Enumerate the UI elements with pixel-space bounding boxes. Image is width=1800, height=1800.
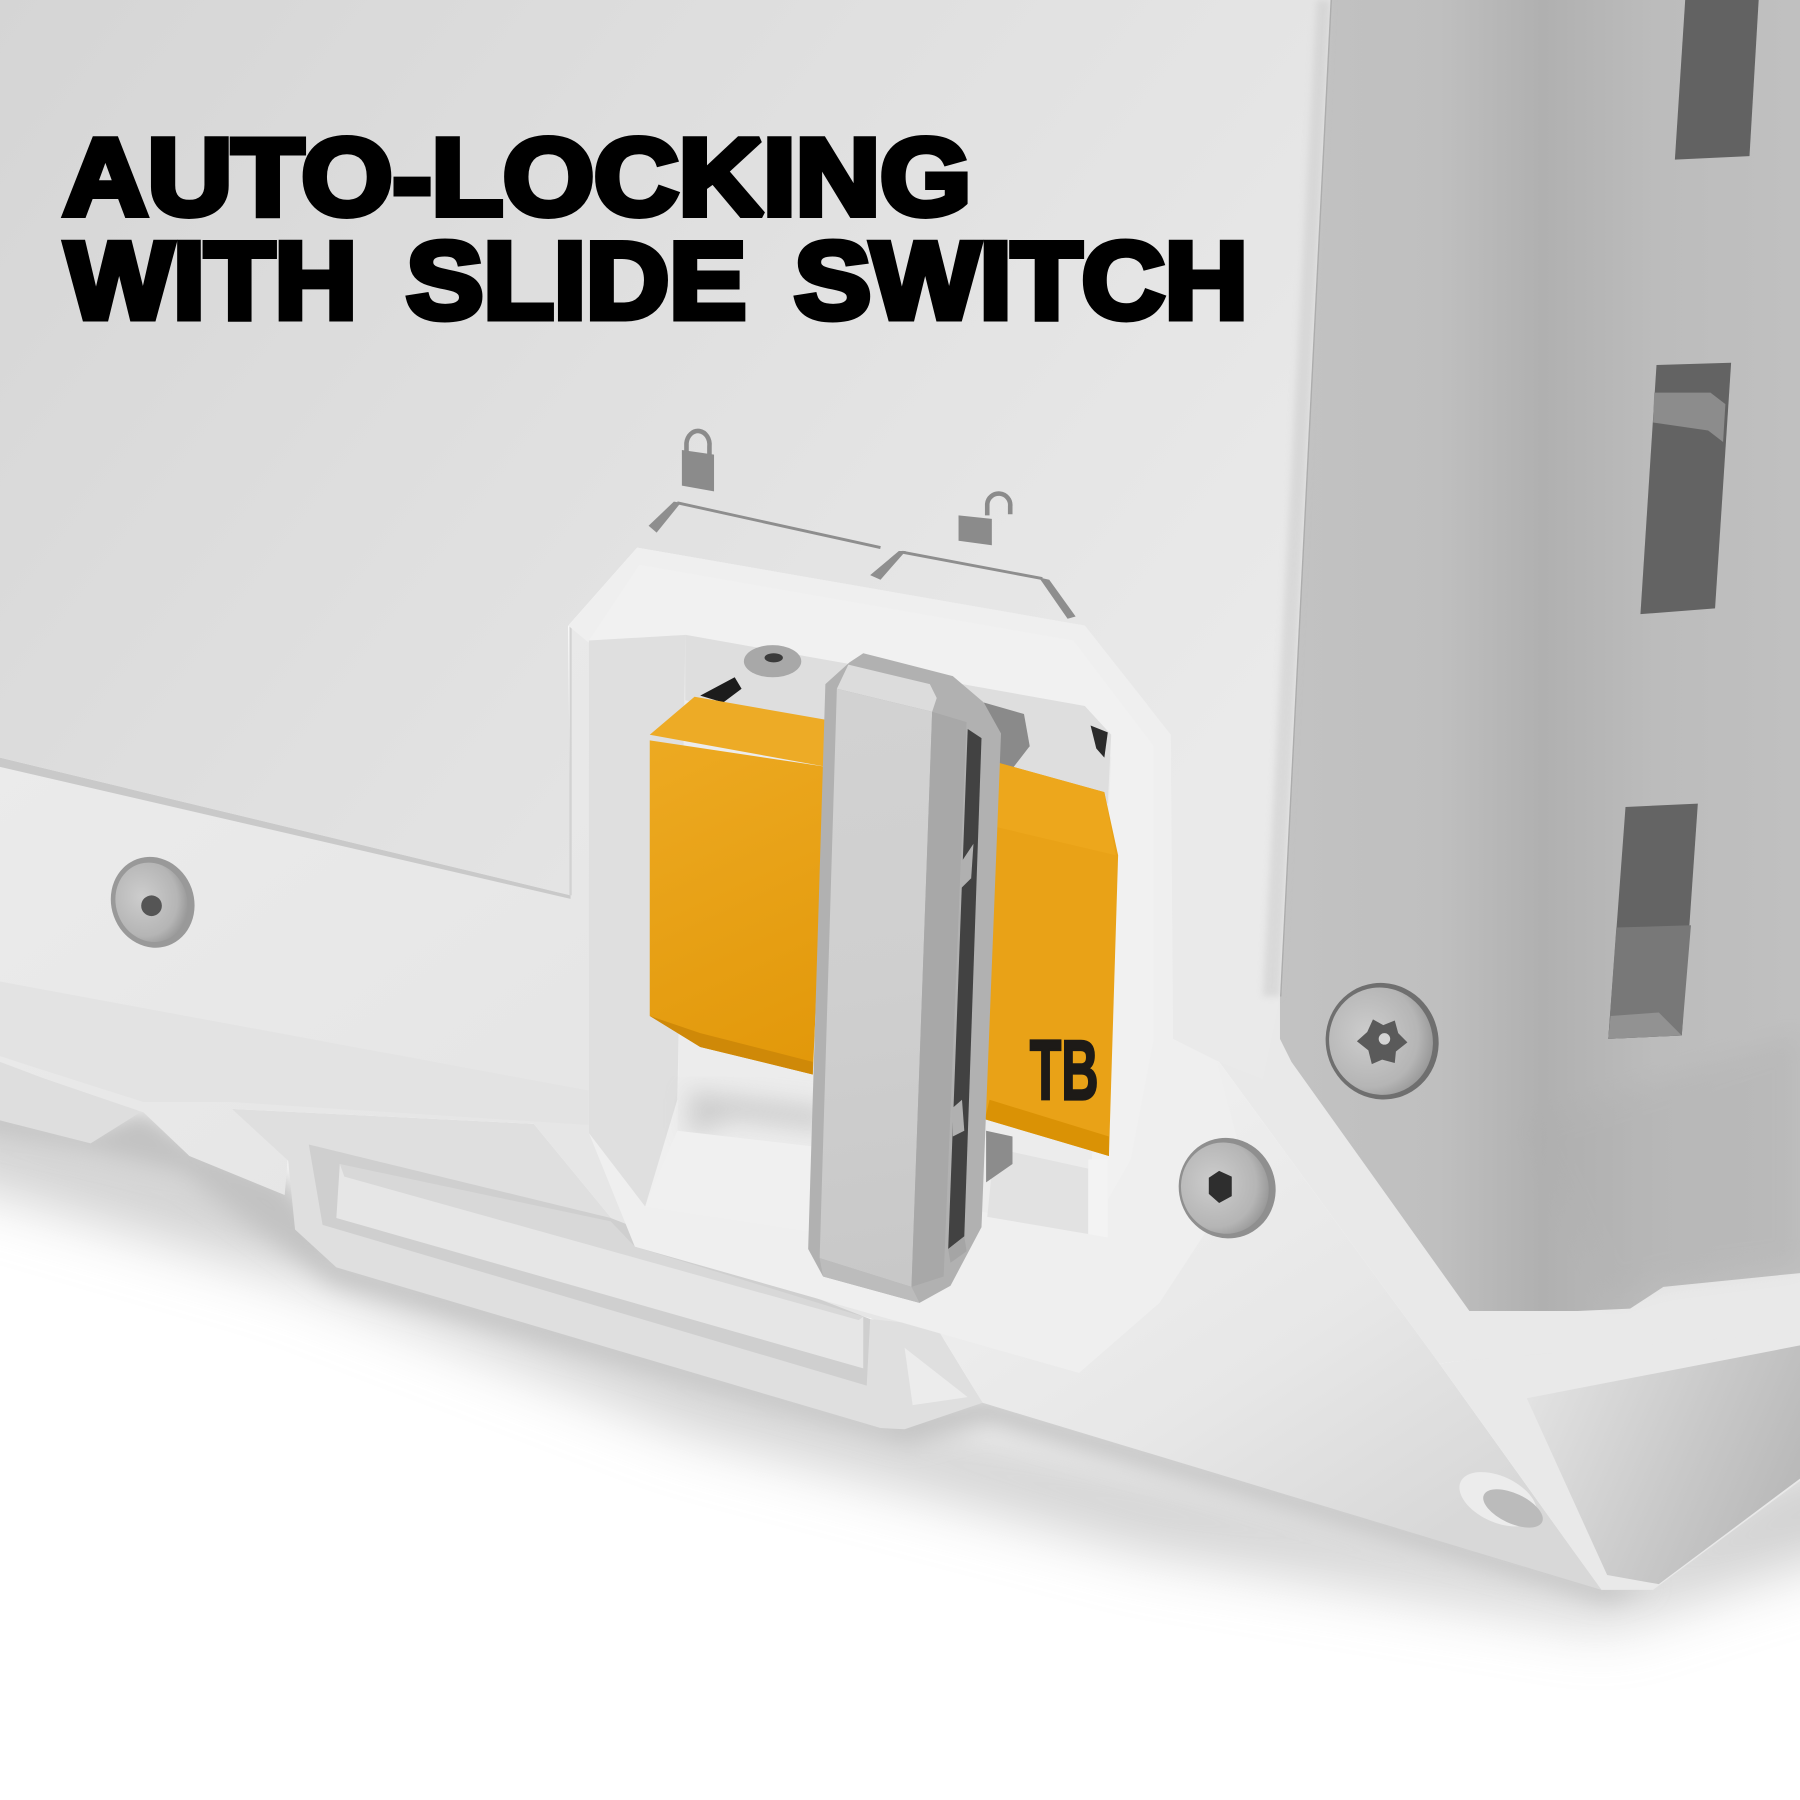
side panel: gray vented wall xyxy=(1280,0,1800,1311)
frame rim xyxy=(589,565,1154,1234)
title xyxy=(63,117,1248,342)
vent slot: middle xyxy=(1640,363,1731,614)
icon: unlocked padlock xyxy=(959,494,1010,545)
orange lock block xyxy=(650,697,1118,1156)
title line 2 xyxy=(65,220,1248,342)
title line 1: AUTO-LOCKING xyxy=(63,117,971,239)
frame left wall xyxy=(589,635,686,1207)
handle front face xyxy=(820,689,932,1287)
screw: left xyxy=(98,845,207,960)
vent slot: lower xyxy=(1608,804,1698,1039)
base strip around side panel xyxy=(1148,0,1800,1364)
carry clip under body xyxy=(232,1109,983,1429)
pocket floor xyxy=(645,1131,827,1234)
corner housing xyxy=(936,1039,1601,1590)
slide switch frame xyxy=(568,548,1246,1373)
corner gusset xyxy=(1440,1332,1800,1590)
handle bottom facet xyxy=(820,1258,920,1303)
pocket xyxy=(677,635,1111,1234)
screw: torx on side panel xyxy=(1309,967,1455,1115)
handle right bevel xyxy=(911,712,967,1287)
bottom foot xyxy=(0,1033,140,1143)
bottom screw recess xyxy=(1451,1461,1548,1538)
title line 2: WITH xyxy=(65,220,357,342)
pocket hardware xyxy=(700,645,1108,1182)
handle slot xyxy=(948,729,982,1263)
logo: TB: TB xyxy=(1030,1023,1099,1118)
unlocked range bracket xyxy=(870,551,1076,619)
icon: locked padlock xyxy=(682,431,714,491)
title line 2: SWITCH xyxy=(794,220,1248,342)
screw: frame hex xyxy=(1165,1124,1290,1252)
locked range bracket xyxy=(649,502,880,548)
metal slide handle xyxy=(808,653,1001,1303)
handle top facet xyxy=(837,665,937,712)
floor shadow xyxy=(0,1091,1800,1624)
contact shadow xyxy=(0,1102,1653,1601)
body: lower housing xyxy=(0,548,1173,1340)
main panel: upper plate xyxy=(0,0,1330,1079)
side panel lower shading xyxy=(1527,1033,1800,1297)
panel edge shadow xyxy=(1263,0,1330,996)
title line 2: SLIDE xyxy=(406,220,746,342)
vent slot: top xyxy=(1675,0,1759,160)
